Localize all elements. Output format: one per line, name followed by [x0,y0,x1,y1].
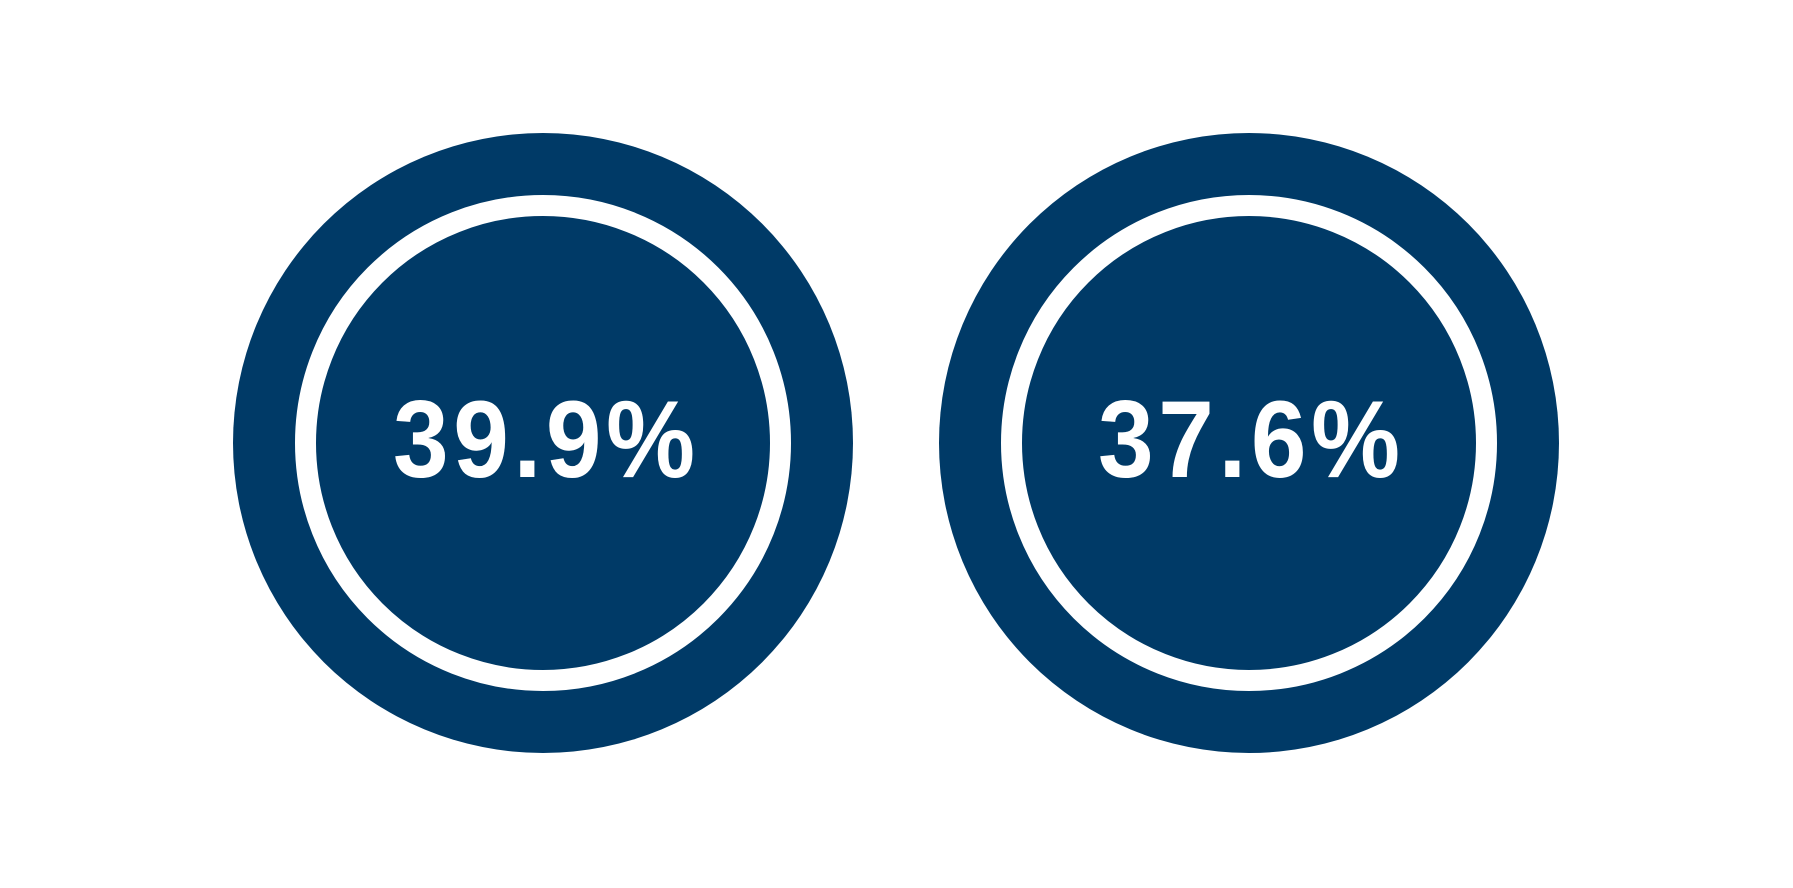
panel: right stat circle [939,133,1559,753]
white ring [1012,206,1486,680]
outer navy disc [939,133,1559,753]
outer navy disc [233,133,853,753]
stat value 39.9%: 39.9% [393,379,695,501]
white ring [306,206,780,680]
stat value 37.6%: 37.6% [1098,379,1400,501]
panel: left stat circle [233,133,853,753]
